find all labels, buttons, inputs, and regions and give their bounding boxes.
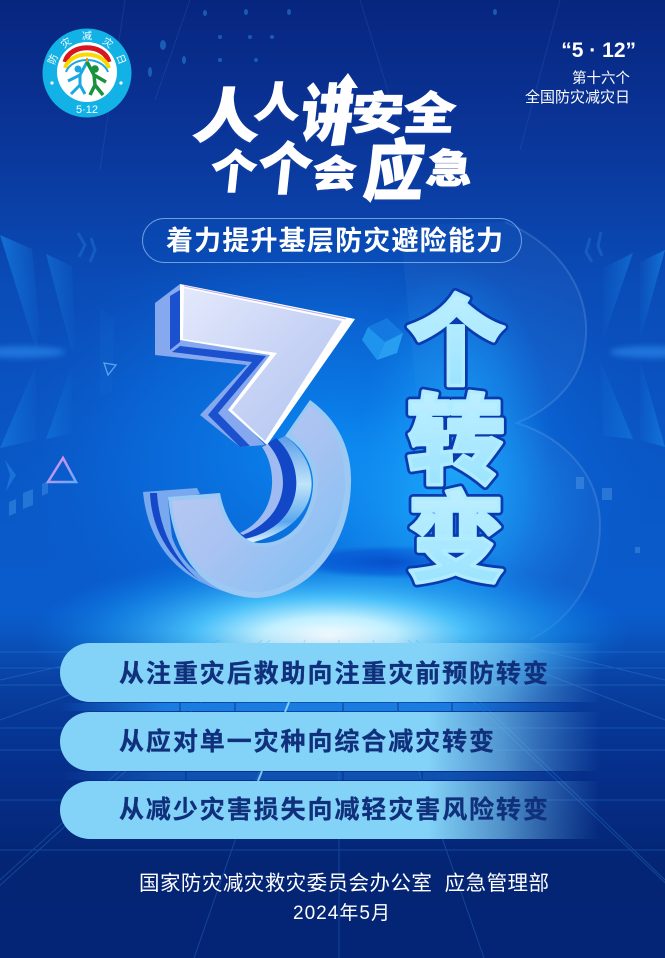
date block: 全国防灾减灾日 xyxy=(525,88,630,106)
numeral 3 inner curve xyxy=(240,436,312,543)
background dots xyxy=(148,9,497,77)
stage glow xyxy=(30,545,630,722)
title: 人 xyxy=(190,85,264,150)
logo text: 日 xyxy=(113,53,127,66)
change bar 2 xyxy=(60,712,600,771)
date block: 第十六个 xyxy=(572,69,630,87)
perspective grid floor xyxy=(0,630,665,958)
title xyxy=(190,73,475,210)
date block: “5 · 12” xyxy=(561,39,636,62)
footer date: 2024年5月 xyxy=(293,902,390,924)
title: 急 xyxy=(424,148,475,192)
heading: 3 changes: 转 xyxy=(407,386,505,496)
logo badge xyxy=(42,28,132,118)
heading: 3 changes: 转 xyxy=(407,386,505,496)
icon: small triangle xyxy=(104,363,116,375)
numeral 3 bowl xyxy=(168,400,351,598)
numeral 3 xyxy=(143,284,355,598)
heading: 3 changes: 变 xyxy=(407,484,505,594)
title: 应 xyxy=(360,134,428,210)
icon: neon triangle xyxy=(48,458,76,482)
title: 安 xyxy=(349,90,406,139)
title: 讲 xyxy=(298,81,357,150)
heading: 3 changes: 个 xyxy=(407,287,505,397)
logo text: 防 xyxy=(45,52,61,66)
ghost numeral 3 xyxy=(400,222,600,640)
numeral 3 upper extrusion xyxy=(155,284,277,447)
date block xyxy=(525,39,636,106)
change bar 3: 从减少灾害损失向减轻灾害风险转变 xyxy=(119,796,548,824)
numeral 3 lower extrusion xyxy=(143,488,257,597)
title: 个 xyxy=(208,146,259,198)
change bar 1 xyxy=(60,643,600,702)
logo text: 灾 xyxy=(100,34,116,51)
heading: 3 changes: 个 xyxy=(407,287,505,397)
heading: 3 changes: 变 xyxy=(407,484,505,594)
logo text: 灾 xyxy=(58,34,74,51)
logo text: 5·12 xyxy=(76,104,98,116)
logo text: 减 xyxy=(82,30,92,42)
decorative side panels xyxy=(0,232,665,553)
logo rainbow xyxy=(65,48,109,72)
title: 人 xyxy=(252,80,303,126)
logo figures xyxy=(68,58,106,95)
subtitle pill xyxy=(142,218,522,262)
title: 全 xyxy=(401,90,458,139)
change bar 2: 从应对单一灾种向综合减灾转变 xyxy=(119,727,494,756)
change bar 3 xyxy=(60,781,600,839)
heading: 3 changes xyxy=(361,265,551,615)
title: 会 xyxy=(310,153,359,195)
numeral 3 upper face xyxy=(180,284,355,445)
footer issuer: 国家防灾减灾救灾委员会办公室 应急管理部 xyxy=(139,872,549,895)
logo text xyxy=(45,30,127,116)
change bar 1: 从注重灾后救助向注重灾前预防转变 xyxy=(119,660,548,688)
title arrow xyxy=(331,73,358,146)
icon: cube xyxy=(362,318,403,360)
title: 个 xyxy=(255,138,315,201)
subtitle pill: 着力提升基层防灾避险能力 xyxy=(166,225,503,256)
